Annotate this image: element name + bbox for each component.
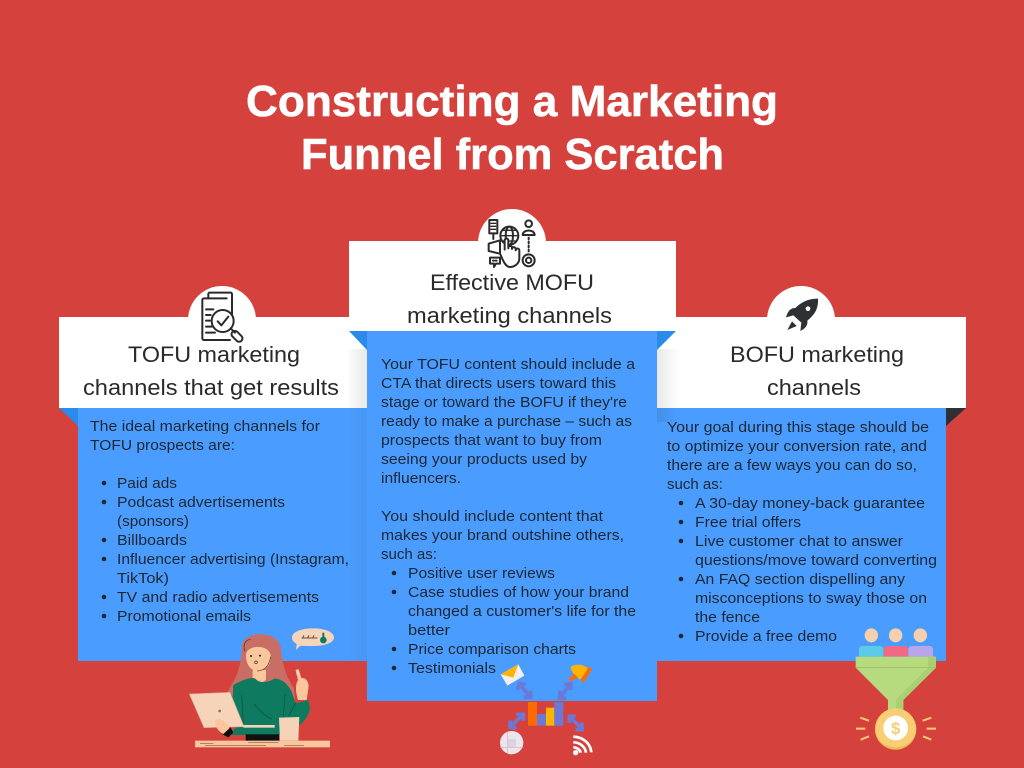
icon: wifi: [573, 737, 591, 754]
icon: lamp: [568, 665, 592, 682]
panel: BOFU: [657, 286, 966, 661]
BOFU text: An FAQ section dispelling any: [695, 571, 906, 588]
funnel: [856, 657, 936, 711]
TOFU text: The ideal marketing channels for: [90, 418, 320, 435]
icon badge: MOFU circle: [478, 209, 546, 277]
BOFU text: to optimize your conversion rate, and: [667, 438, 927, 455]
icon: envelope: [501, 664, 524, 686]
MOFU text: seeing your products used by: [381, 451, 588, 468]
BOFU header card: [657, 317, 966, 408]
icon badge: TOFU circle: [188, 286, 256, 354]
icon: rocket: [786, 299, 818, 331]
BOFU text: [667, 419, 937, 645]
icon: marketing network: [489, 220, 535, 267]
MOFU body: [367, 331, 657, 701]
title: Funnel from Scratch: [301, 130, 724, 179]
people: [859, 628, 933, 657]
TOFU text: Paid ads: [117, 475, 177, 492]
BOFU text: misconceptions to sway those on: [695, 590, 927, 607]
desk: [195, 741, 330, 747]
TOFU text: Billboards: [117, 532, 187, 549]
coin: $: [891, 719, 901, 738]
MOFU text: Positive user reviews: [408, 565, 555, 582]
BOFU text: Provide a free demo: [695, 628, 837, 645]
MOFU text: You should include content that: [381, 508, 604, 525]
TOFU fold: [59, 408, 78, 426]
BOFU text: Live customer chat to answer: [695, 533, 903, 550]
MOFU text: Price comparison charts: [408, 641, 576, 658]
TOFU text: TV and radio advertisements: [117, 589, 319, 606]
MOFU heading: marketing channels: [407, 303, 612, 328]
MOFU text: Your TOFU content should include a: [381, 356, 636, 373]
TOFU text: [90, 418, 349, 625]
illustration: woman with laptop: [189, 628, 334, 747]
MOFU text: ready to make a purchase – such as: [381, 413, 632, 430]
BOFU body: [657, 408, 946, 661]
TOFU header card: [59, 317, 367, 408]
hand: [296, 669, 309, 700]
TOFU text: Promotional emails: [117, 608, 251, 625]
BOFU text: A 30-day money-back guarantee: [695, 495, 925, 512]
sweater: [230, 678, 310, 735]
panel: TOFU: [59, 286, 367, 661]
hair: [227, 634, 295, 702]
MOFU text: CTA that directs users toward this: [381, 375, 616, 392]
BOFU text: Free trial offers: [695, 514, 801, 531]
MOFU heading: [407, 270, 612, 328]
MOFU text: prospects that want to buy from: [381, 432, 602, 449]
title: [246, 77, 778, 179]
MOFU text: better: [408, 622, 450, 639]
cup: [279, 717, 299, 741]
TOFU text: TikTok): [117, 570, 169, 587]
arrows: [510, 684, 582, 730]
speech bubble: [292, 628, 334, 650]
coin rays: [856, 718, 936, 740]
MOFU text: influencers.: [381, 470, 461, 487]
TOFU text: TOFU prospects are:: [90, 437, 235, 454]
BOFU heading: [730, 342, 904, 400]
icon badge: BOFU circle: [767, 286, 835, 354]
bar chart: [528, 702, 563, 726]
BOFU text: there are a few ways you can do so,: [667, 457, 917, 474]
BOFU heading: channels: [767, 375, 861, 400]
MOFU text: changed a customer's life for the: [408, 603, 636, 620]
BOFU text: questions/move toward converting: [695, 552, 937, 569]
illustration: funnel with coin: [856, 628, 936, 750]
panel: MOFU: [349, 209, 676, 701]
BOFU heading: BOFU marketing: [730, 342, 904, 367]
MOFU header card: [349, 241, 676, 331]
MOFU text: stage or toward the BOFU if they're: [381, 394, 627, 411]
laptop: [189, 692, 244, 728]
MOFU text: Case studies of how your brand: [408, 584, 629, 601]
icon: globe: [500, 731, 523, 754]
BOFU fold: [946, 408, 966, 426]
TOFU body: [78, 408, 367, 661]
BOFU text: the fence: [695, 609, 760, 626]
TOFU heading: channels that get results: [83, 375, 339, 400]
TOFU text: (sponsors): [117, 513, 189, 530]
MOFU text: such as:: [381, 546, 437, 563]
TOFU text: Influencer advertising (Instagram,: [117, 551, 349, 568]
BOFU text: such as:: [667, 476, 723, 493]
MOFU heading: Effective MOFU: [430, 270, 594, 295]
MOFU left fold: [349, 331, 367, 350]
MOFU text: Testimonials: [408, 660, 496, 677]
TOFU heading: TOFU marketing: [128, 342, 300, 367]
TOFU text: Podcast advertisements: [117, 494, 285, 511]
TOFU heading: [83, 342, 339, 400]
MOFU text: makes your brand outshine others,: [381, 527, 624, 544]
MOFU text: [381, 356, 636, 677]
neck and face: [246, 647, 271, 682]
title: Constructing a Marketing: [246, 77, 778, 126]
icon: document with magnifier: [202, 293, 244, 343]
illustration: channels chart: [500, 664, 592, 754]
BOFU text: Your goal during this stage should be: [667, 419, 929, 436]
trousers: [246, 734, 279, 741]
MOFU right fold: [657, 331, 676, 350]
